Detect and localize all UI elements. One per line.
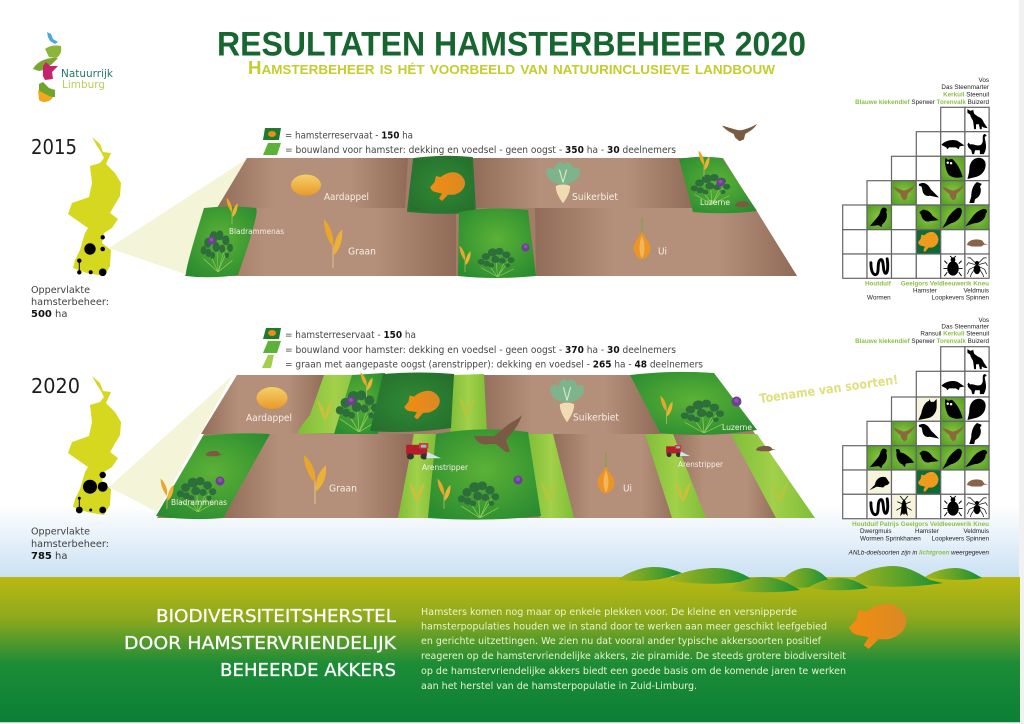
ground bbox=[0, 577, 1020, 722]
title: RESULTATEN HAMSTERBEHEER 2020 bbox=[217, 26, 806, 64]
legend 2020: = bouwland voor hamster: dekking en voedsel - geen oogst - 370 ha - 30 deelnemers bbox=[285, 345, 676, 356]
zoom beam 2015 bbox=[109, 158, 248, 274]
species labels top 2020: Vos bbox=[978, 317, 989, 324]
patch Luzerne bbox=[630, 372, 757, 435]
subtitle: Hamsterbeheer is hét voorbeeld van natuurinclusieve landbouw bbox=[248, 58, 776, 78]
bird over field 2015 bbox=[722, 124, 757, 141]
hills bbox=[617, 566, 982, 592]
patch centre with arenstripper strips bbox=[398, 429, 815, 520]
patch Bladrammenas bbox=[186, 197, 257, 277]
heading: BEHEERDE AKKERS bbox=[220, 661, 396, 681]
map of Limburg 2015 with dots bbox=[68, 137, 121, 276]
species labels bottom 2020 bbox=[852, 521, 989, 542]
field labels 2020: Suikerbiet bbox=[573, 412, 619, 424]
zoom beam 2020 bbox=[109, 376, 232, 512]
species labels bottom 2020: Hamster bbox=[915, 528, 939, 535]
bird over field bbox=[474, 415, 522, 452]
legend note: ANLb-doelsoorten zijn in lichtgroen weergegeven bbox=[848, 550, 989, 556]
field labels 2015: Luzerne bbox=[700, 198, 730, 207]
paragraph: aan het herstel van de hamsterpopulatie in Zuid-Limburg. bbox=[421, 681, 697, 692]
species labels bottom 2015: Veldmuis bbox=[963, 288, 989, 294]
species labels top 2015 bbox=[855, 77, 989, 106]
heading: BIODIVERSITEITSHERSTEL bbox=[156, 607, 396, 627]
hamster silhouette bbox=[849, 604, 906, 649]
heading: DOOR HAMSTERVRIENDELIJK bbox=[124, 634, 397, 654]
species labels bottom 2015 bbox=[865, 280, 989, 302]
field labels 2020: Luzerne bbox=[722, 423, 752, 432]
light strips top bbox=[298, 374, 487, 434]
beet bbox=[546, 162, 580, 203]
field labels 2015: Aardappel bbox=[324, 192, 369, 203]
beet bbox=[550, 379, 584, 422]
field labels 2020: Graan bbox=[329, 484, 357, 494]
species labels top 2020: Blauwe kiekendief Sperwer Torenvalk Buizerd bbox=[855, 338, 989, 345]
pyramid cells 2020 bbox=[843, 347, 989, 519]
pyramid 2020 bbox=[843, 317, 989, 556]
wheat bbox=[324, 219, 342, 268]
species labels top 2015: Kerkuil Steenuil bbox=[943, 92, 989, 98]
patch clover top bbox=[334, 372, 385, 434]
heading bbox=[124, 607, 397, 681]
paragraph: Hamsters komen nog maar op enkele plekken voor. De kleine en versnipperde bbox=[421, 607, 797, 618]
patch centre bbox=[458, 208, 536, 278]
species labels bottom 2020: Veldmuis bbox=[963, 528, 989, 535]
legend 2015: = bouwland voor hamster: dekking en voedsel - geen oogst - 350 ha - 30 deelnemers bbox=[285, 145, 676, 156]
map of Limburg 2020 with dots bbox=[68, 376, 121, 515]
field 2020 bbox=[156, 372, 815, 520]
species labels bottom 2020: Houtduif Patrijs Geelgors Veldleeuwerik Kneu bbox=[852, 521, 989, 528]
field labels 2020: Ui bbox=[623, 484, 632, 494]
pyramid 2015 bbox=[843, 77, 989, 302]
species labels bottom 2015: Loopkevers Spinnen bbox=[932, 294, 989, 302]
field labels 2020: Arenstripper bbox=[422, 463, 469, 472]
species labels top 2020: Das Steenmarter bbox=[941, 324, 989, 330]
field 2015 bbox=[185, 150, 797, 278]
legend 2020: = hamsterreservaat - 150 ha bbox=[285, 330, 416, 341]
field labels 2015 bbox=[229, 192, 730, 258]
pyramid cells 2015 bbox=[843, 107, 989, 278]
species labels top 2015: Das Steenmarter bbox=[941, 84, 989, 91]
species labels bottom 2020: Wormen Sprinkhanen bbox=[860, 536, 921, 542]
species labels bottom 2020: Dwergmuis bbox=[860, 528, 892, 535]
paragraph: hamsterpopulaties houden we in stand door te werken aan meer geschikt leefgebied bbox=[421, 622, 827, 632]
arenstripper machine 2 bbox=[666, 445, 690, 457]
onion bbox=[598, 453, 614, 493]
species labels top 2015: Blauwe kiekendief Sperwer Torenvalk Buizerd bbox=[855, 99, 989, 106]
onion bbox=[634, 218, 650, 259]
field labels 2015: Graan bbox=[348, 246, 376, 258]
species labels bottom 2015: Geelgors Veldleeuwerik Kneu bbox=[901, 280, 989, 288]
species labels bottom 2015: Hamster bbox=[913, 288, 937, 294]
legend 2015: = hamsterreservaat - 150 ha bbox=[285, 130, 413, 142]
field labels 2015: Suikerbiet bbox=[572, 192, 618, 203]
reserve patch bbox=[370, 372, 454, 432]
legend 2015 bbox=[263, 128, 676, 156]
species labels bottom 2015: Wormen bbox=[867, 294, 891, 302]
pyramid animals 2015 bbox=[870, 109, 988, 277]
wheat bbox=[304, 455, 326, 504]
potato bbox=[256, 387, 288, 409]
field labels 2020: Aardappel bbox=[246, 413, 292, 424]
legend 2020: = graan met aangepaste oogst (arenstripper): dekking en voedsel - 265 ha - 48 deelnemers bbox=[285, 360, 703, 370]
field labels 2020: Arenstripper bbox=[678, 460, 724, 469]
logo: Natuurrijk Limburg: Limburg bbox=[62, 79, 105, 91]
paragraph: reageren op de hamstervriendelijke akkers, zie piramide. De steeds grotere biodiversiteit bbox=[421, 651, 846, 662]
surface text 2020: 785 ha bbox=[31, 551, 68, 562]
surface text 2020: hamsterbeheer: bbox=[31, 539, 109, 550]
surface text 2020: Oppervlakte bbox=[31, 526, 90, 538]
species labels top 2015: Vos bbox=[978, 77, 989, 84]
field labels 2020: Bladrammenas bbox=[171, 498, 227, 507]
surface text 2015: 500 ha bbox=[31, 309, 68, 320]
year 2015: 2015 bbox=[31, 135, 77, 159]
bottom band bbox=[0, 566, 1020, 722]
paragraph bbox=[421, 607, 846, 692]
panel: 2020 bbox=[31, 317, 989, 562]
year 2020: 2020 bbox=[31, 374, 80, 398]
panel: 2015 bbox=[31, 77, 989, 320]
species labels top 2020: Ransuil Kerkuil Steenuil bbox=[920, 330, 989, 338]
logo: Natuurrijk Limburg bbox=[33, 32, 114, 102]
paragraph: en gerichte uitzettingen. We zien nu dat vooral ander typische akkersoorten positief bbox=[421, 636, 821, 647]
paragraph: op de hamstervriendelijke akkers biedt een goede basis om de komende jaren te werken bbox=[421, 666, 846, 677]
reserve patch with hamster bbox=[408, 157, 475, 213]
logo: Natuurrijk Limburg: Natuurrijk bbox=[61, 68, 114, 80]
patch Bladrammenas bbox=[156, 433, 270, 519]
increase note: Toename van soorten! bbox=[758, 372, 899, 406]
field labels 2020 bbox=[171, 412, 752, 507]
pyramid animals 2020 bbox=[869, 349, 988, 517]
species labels bottom 2020: Loopkevers Spinnen bbox=[932, 536, 989, 542]
sky background bbox=[0, 505, 1024, 580]
legend 2020 bbox=[262, 328, 703, 370]
field labels 2015: Ui bbox=[658, 246, 667, 258]
species labels bottom 2015: Houtduif bbox=[865, 280, 892, 288]
surface text 2015: hamsterbeheer: bbox=[31, 297, 109, 308]
surface text 2015: Oppervlakte bbox=[31, 285, 90, 296]
potato bbox=[291, 174, 321, 196]
patch Luzerne bbox=[679, 150, 757, 213]
arenstripper machine 1 bbox=[406, 443, 441, 460]
field labels 2015: Bladrammenas bbox=[229, 227, 284, 236]
species labels top 2020 bbox=[855, 317, 989, 345]
